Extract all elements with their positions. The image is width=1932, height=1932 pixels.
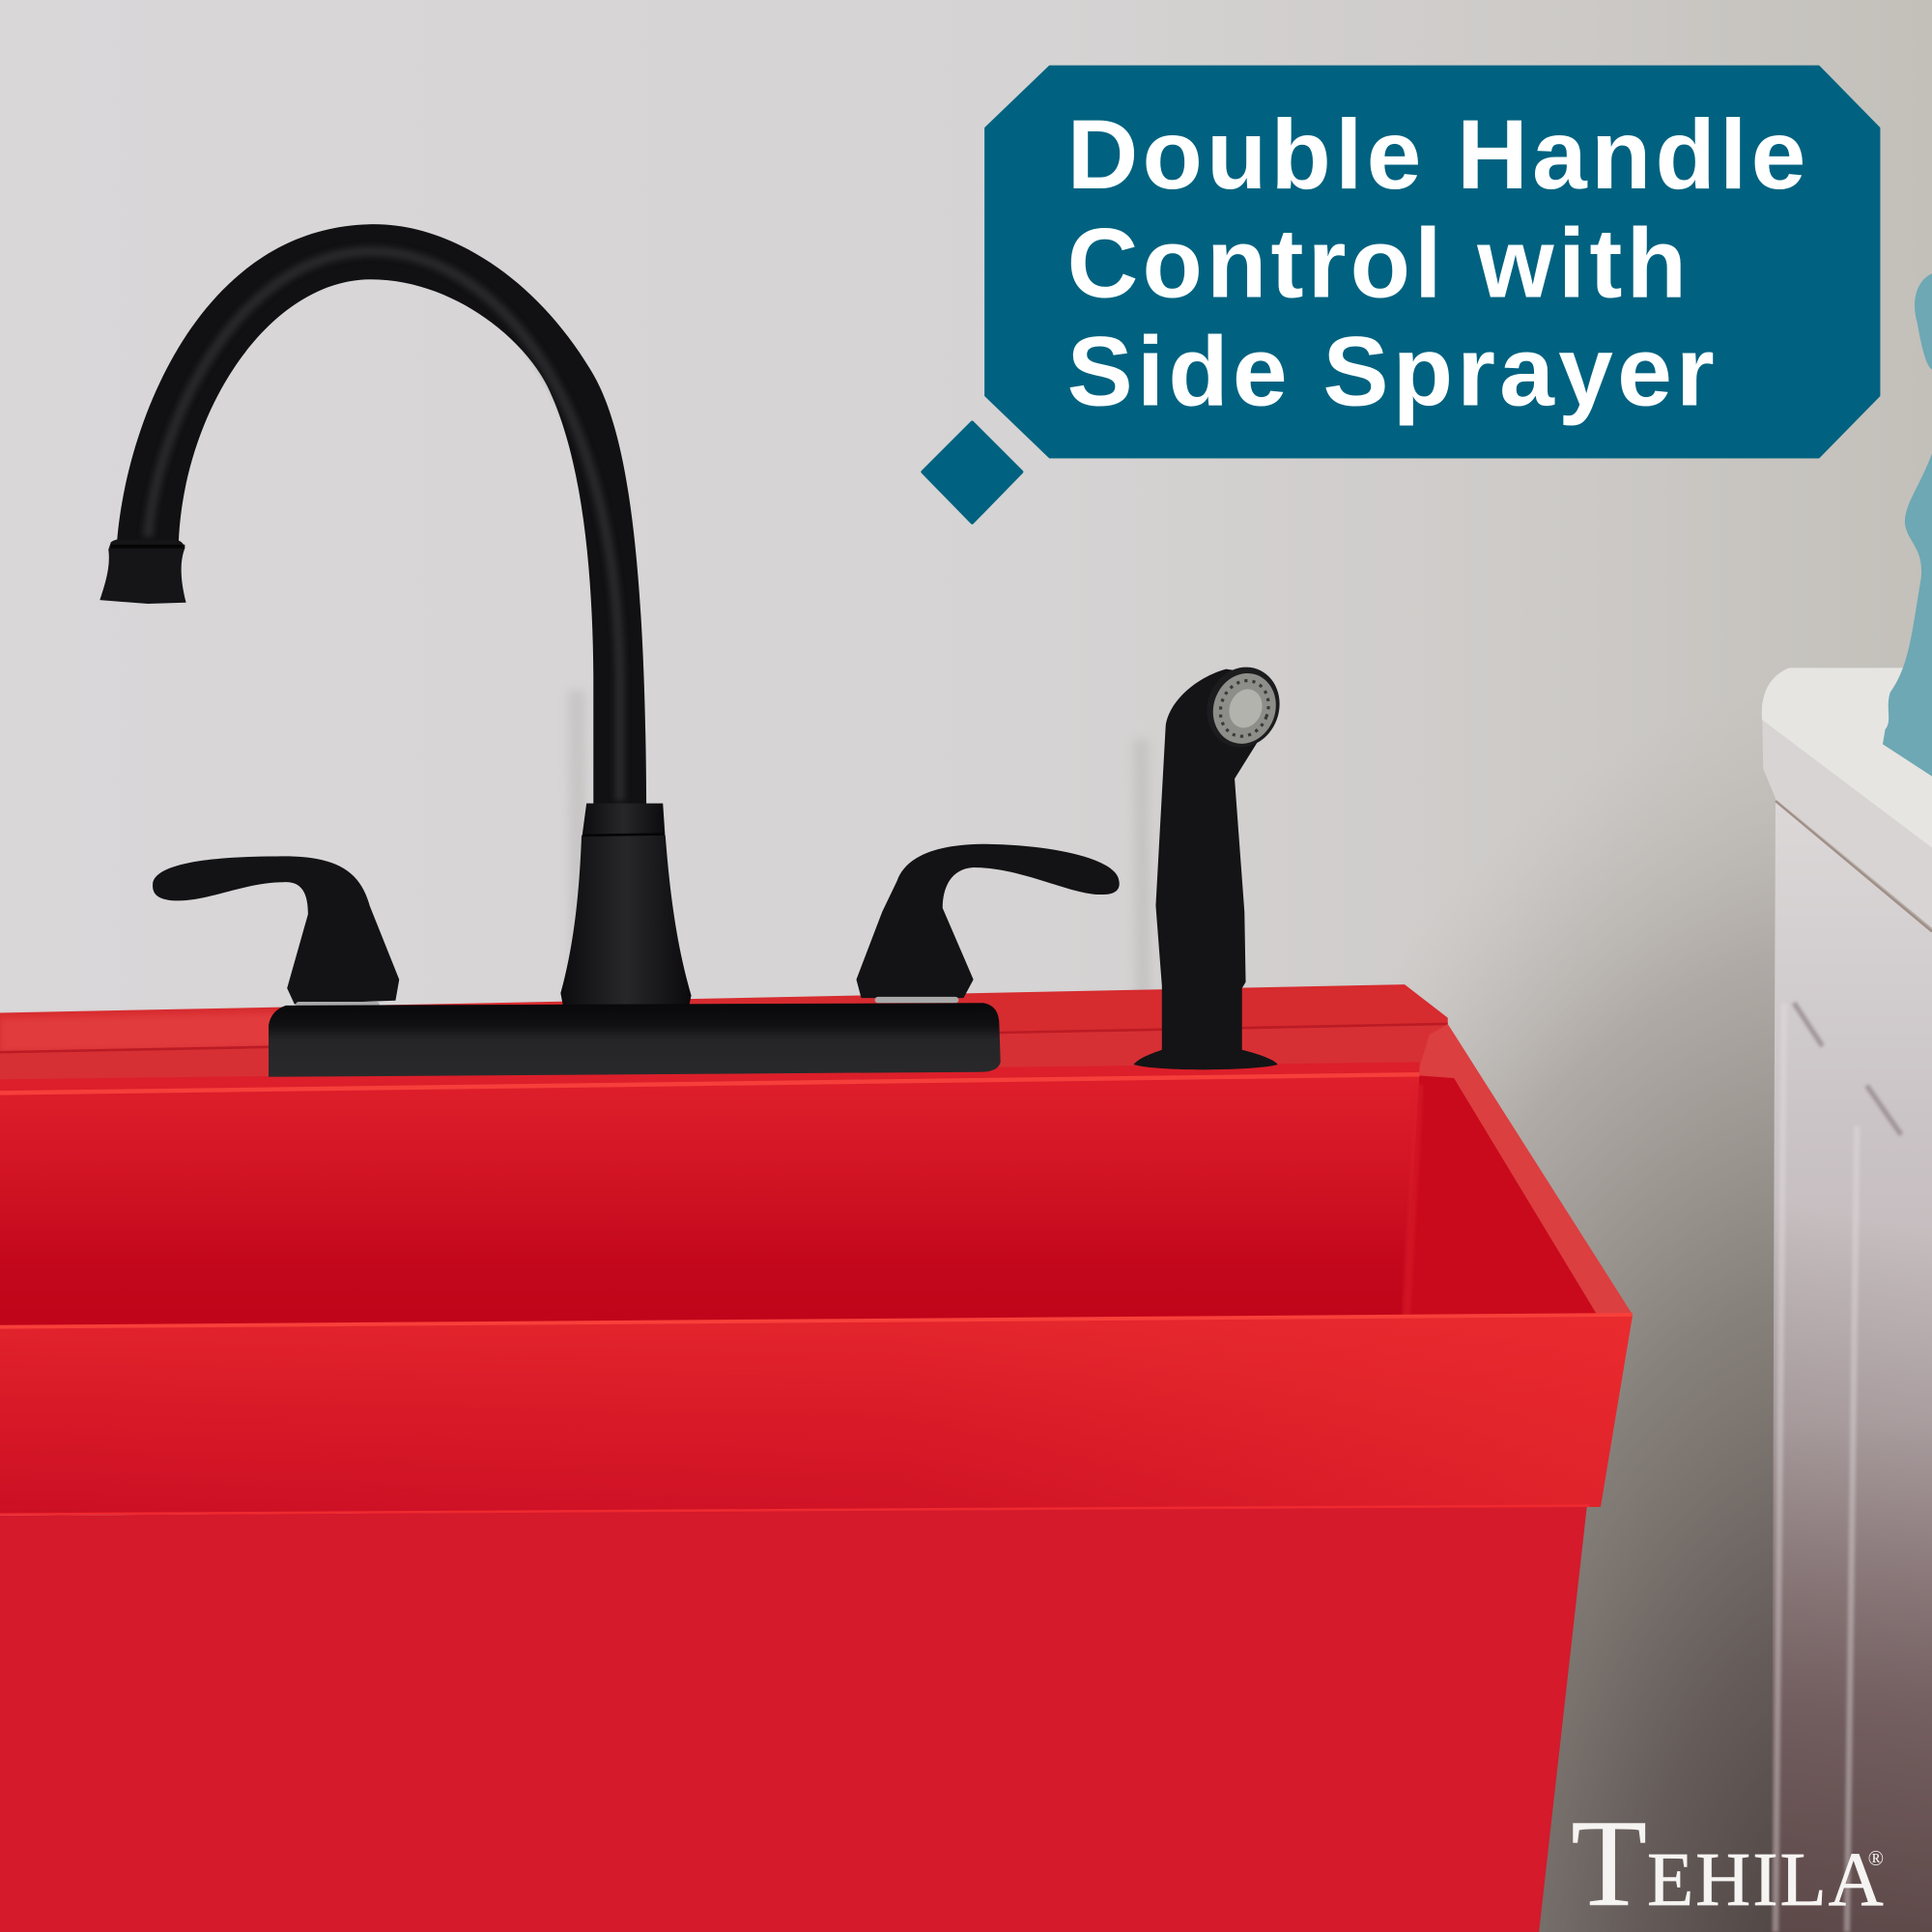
spout highlight xyxy=(148,251,620,801)
band lower line xyxy=(0,1506,1589,1515)
brand logo: EHILA xyxy=(1647,1838,1886,1922)
callout pointer diamond xyxy=(923,423,1021,523)
faucet xyxy=(99,224,1120,1077)
band edge lines xyxy=(0,1315,1633,1327)
neck body xyxy=(560,836,692,1012)
sprayer nozzle dots xyxy=(1212,674,1276,743)
bright lip line xyxy=(0,1074,1419,1093)
brand logo: ® xyxy=(1868,1847,1884,1870)
sprayer center xyxy=(1224,685,1267,732)
washing machine xyxy=(1762,668,1932,1932)
right chrome ring xyxy=(875,997,958,1003)
basin right side wall xyxy=(1405,1076,1597,1319)
rim slope xyxy=(1417,1024,1633,1318)
sprayer head rim xyxy=(1196,657,1291,757)
front lip xyxy=(0,1062,1419,1094)
sink back deck xyxy=(0,984,1479,1099)
front lower panel xyxy=(0,1506,1587,1932)
spout aerator tip xyxy=(99,539,186,604)
band right glow xyxy=(0,1315,1633,1515)
red utility sink xyxy=(0,984,1633,1932)
sprayer body xyxy=(1133,669,1278,1069)
callout heading: Double Handle xyxy=(1067,99,1810,210)
callout heading: Control with xyxy=(1067,208,1690,318)
teal towel xyxy=(1883,273,1932,777)
callout box xyxy=(985,67,1879,457)
brand logo: T xyxy=(1571,1794,1647,1932)
deck lower strip xyxy=(0,1024,1452,1092)
faucet shadow on wall xyxy=(577,690,1144,1035)
side sprayer xyxy=(1133,657,1291,1069)
callout heading: Side Sprayer xyxy=(1067,317,1719,427)
deck highlight xyxy=(0,1012,277,1052)
deck plate base xyxy=(269,1003,1001,1077)
left handle xyxy=(153,856,399,1005)
collar seam xyxy=(582,835,665,836)
neck collar xyxy=(582,804,666,840)
left chrome ring xyxy=(296,1002,380,1008)
right handle xyxy=(856,844,1120,998)
deck crease xyxy=(0,1024,1448,1052)
basin inner back wall xyxy=(0,1076,1597,1327)
basin corner fold xyxy=(1406,1084,1419,1316)
aerator ring xyxy=(111,545,185,549)
front upper band xyxy=(0,1315,1633,1515)
sprayer face xyxy=(1204,665,1286,753)
gooseneck spout xyxy=(117,224,646,813)
